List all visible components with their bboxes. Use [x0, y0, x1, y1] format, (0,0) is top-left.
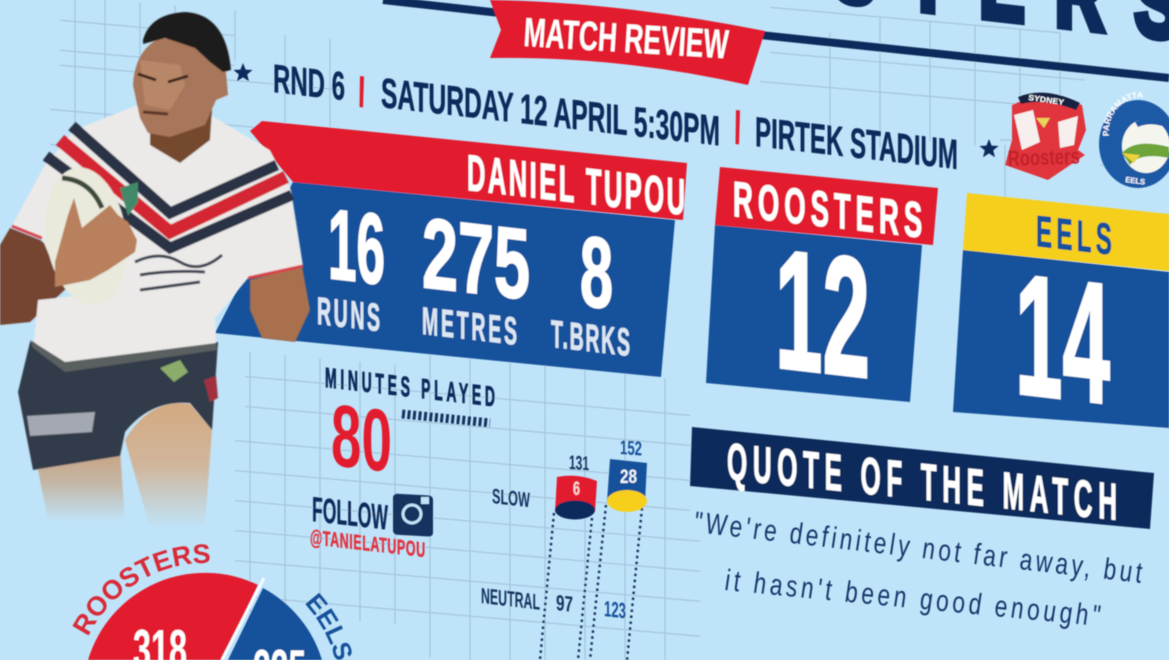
stat: metres: METRES [422, 299, 517, 354]
chart labels and values: 131 [569, 452, 589, 475]
pie slice: Eels [228, 588, 322, 660]
stat: tackle breaks: 8 [580, 215, 613, 331]
panel: quote of the match [690, 427, 1154, 633]
pie chart: possession [72, 543, 352, 660]
cylinder: Roosters slow [555, 476, 597, 520]
jersey chevrons [46, 126, 292, 248]
stat: metres: 275 [422, 197, 530, 321]
logo: Parramatta Eels [1098, 91, 1169, 189]
quote text: "We're definitely not far away, but [694, 505, 1143, 590]
quote text: it hasn't been good enough" [725, 563, 1101, 633]
logo: Sydney Roosters: SYDNEY [1028, 93, 1065, 107]
logo: Sydney Roosters: Roosters [1007, 143, 1080, 171]
legs [35, 403, 212, 528]
stat: metres [422, 197, 530, 354]
header rule [383, 0, 1169, 78]
follow on instagram [310, 490, 433, 562]
match info line: SATURDAY 12 APRIL 5:30PM [381, 69, 720, 155]
stat: tackle breaks: T.BRKS [551, 312, 630, 365]
sleeve trims [12, 226, 303, 278]
arm right and hand [250, 266, 310, 342]
banner: match review [490, 0, 765, 85]
logo: Parramatta Eels: PARRAMATTA [1102, 91, 1144, 137]
logo: Sydney Roosters [1005, 93, 1086, 180]
panel: Roosters score: ROOSTERS [733, 170, 922, 249]
stat: runs: RUNS [317, 289, 380, 340]
stats panel red heading [250, 121, 687, 220]
player photo illustration [0, 12, 310, 528]
stat: runs: 16 [328, 188, 385, 306]
hand on ball [55, 198, 137, 287]
quote text [694, 505, 1143, 633]
chart labels and values: 97 [556, 590, 573, 617]
cylinder: Eels slow: 28 [620, 467, 637, 488]
chart: ruck speed [481, 437, 647, 660]
shorts [18, 342, 218, 470]
minutes played: MINUTES PLAYED [325, 362, 495, 413]
logo: Parramatta Eels: EELS [1125, 175, 1146, 187]
panel: player stats [215, 121, 687, 377]
panel: Eels score [953, 193, 1169, 441]
sponsor signature scribble [135, 255, 222, 290]
minutes played [325, 362, 495, 491]
Roosters label: ROOSTERS [72, 543, 210, 636]
chart labels and values: 152 [620, 437, 642, 461]
banner: match review: MATCH REVIEW [522, 9, 730, 68]
stats panel blue body [215, 182, 675, 377]
dotted guide lines [540, 505, 642, 660]
panel: Roosters score: 12 [775, 214, 870, 415]
panel: Eels score: EELS [1036, 206, 1112, 265]
jersey [12, 106, 303, 364]
icon: star right [979, 139, 999, 157]
chart labels and values: NEUTRAL [481, 583, 540, 615]
neck and head [133, 12, 231, 163]
match info line: PIRTEK STADIUM [755, 108, 958, 178]
follow on instagram: @TANIELATUPOU [310, 525, 425, 562]
follow on instagram: FOLLOW [312, 490, 388, 538]
panel: Roosters score [706, 167, 938, 415]
hatched rule [402, 414, 490, 423]
minutes value: 80 [331, 385, 392, 491]
chart labels and values: SLOW [492, 485, 530, 512]
stat: tackle breaks [551, 215, 630, 365]
icon: star left [233, 63, 253, 81]
panel: quote of the match: QUOTE OF THE MATCH [727, 432, 1117, 531]
chart labels and values: 123 [604, 596, 626, 623]
match info line: RND 6 [273, 56, 345, 109]
cylinder: Eels slow [607, 459, 647, 512]
cylinder: Roosters slow: 6 [573, 479, 580, 500]
arm left [0, 200, 135, 325]
pie slice: Roosters [88, 573, 258, 660]
stat: runs [317, 188, 385, 340]
player name: DANIEL TUPOU [467, 143, 685, 226]
chart labels and values [481, 437, 642, 623]
icon: instagram [393, 494, 433, 537]
ball [37, 162, 138, 310]
